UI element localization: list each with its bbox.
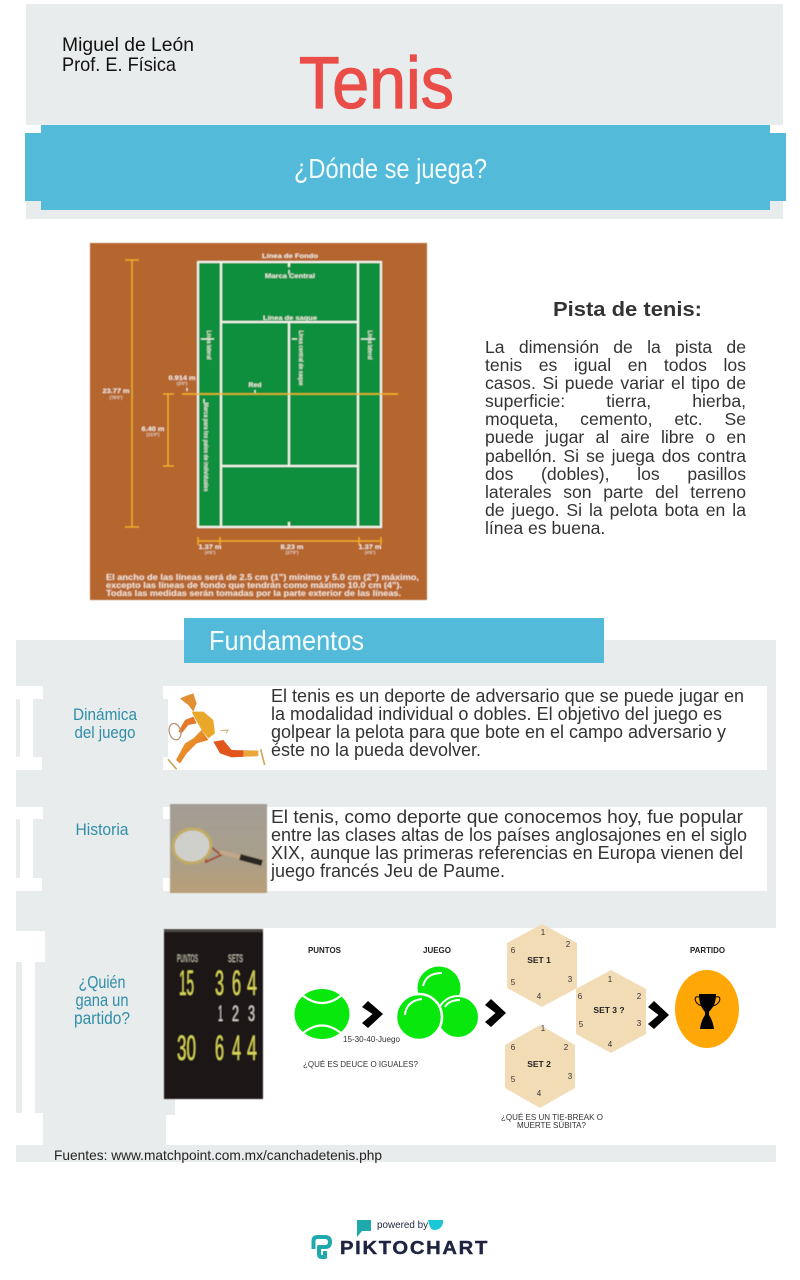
caption: 15-30-40-juego: 15-30-40-Juego [343, 1035, 401, 1044]
court footnote: Todas las medidas serán tomadas por la parte exterior de las líneas. [106, 589, 401, 598]
hexagon: set 1: 2 [566, 940, 571, 949]
court labels: (21'0") [147, 432, 160, 437]
text: dinamica: golpear la pelota para que bote en el campo adversario y [271, 722, 726, 742]
hexagon: set 3: 1 [608, 975, 613, 984]
hexagon: set 3: 6 [578, 992, 583, 1001]
hexagon: set 1: 5 [511, 978, 516, 987]
court labels: Línea lateral [205, 330, 212, 360]
hexagon: set 3: 2 [637, 992, 642, 1001]
label: dinamica: del juego [74, 724, 136, 742]
diagram headings [308, 945, 725, 955]
text: historia: XIX, aunque las primeras referencias en Europa vienen del [271, 843, 743, 863]
court footnote [106, 573, 419, 598]
text: pista de tenis description: moqueta, cemento, etc. Se [485, 409, 746, 429]
court labels: Línea central de saque [297, 330, 304, 386]
court labels: 8.23 m [280, 544, 304, 551]
caption: tie-break: MUERTE SÚBITA? [517, 1120, 586, 1130]
author credit: Miguel de León [62, 34, 194, 56]
court labels: Línea de Fondo [262, 253, 318, 260]
label: historia: Historia [76, 821, 129, 839]
hexagon: set 2: 6 [511, 1043, 516, 1052]
hexagon: set 1: SET 1 [527, 955, 551, 965]
hexagon: set 2: 3 [568, 1072, 573, 1081]
text: pista de tenis description: línea es buena. [485, 518, 605, 538]
court surface [198, 262, 381, 527]
court footnote: El ancho de las líneas será de 2.5 cm (1") mínimo y 5.0 cm (2") máximo, [106, 573, 419, 582]
icon: trophy on orange oval [675, 970, 739, 1048]
small white pointers [187, 270, 375, 403]
hexagon: set 3: SET 3 ? [593, 1005, 625, 1015]
banner: donde se juega: ¿Dónde se juega? [294, 153, 487, 184]
hexagon: set 3 [576, 970, 646, 1053]
scoreboard [164, 929, 263, 1099]
text: pista de tenis description: de juego. Si la pelota bota en la [485, 500, 746, 520]
logo: piktochart [314, 1220, 489, 1258]
row: dinamica del juego [73, 686, 767, 770]
scoreboard: SETS [228, 953, 243, 965]
label: dinamica [73, 706, 138, 742]
hexagon: set 2: 1 [541, 1024, 546, 1033]
text: dinamica: El tenis es un deporte de adversario que se puede jugar en [271, 686, 744, 706]
court labels: Red [248, 382, 262, 389]
tennis court diagram [90, 243, 427, 600]
author credit: Prof. E. Física [62, 54, 176, 76]
scoreboard: 4 [247, 1029, 257, 1068]
photo: wooden racket [170, 804, 267, 893]
text: pista de tenis description: pabellón. Si se juega dos contra [485, 446, 746, 466]
court labels: 6.40 m [142, 426, 165, 433]
scoreboard: 6 [232, 964, 241, 1003]
scoreboard: 4 [232, 1029, 241, 1068]
hexagon: set 2: 4 [537, 1089, 542, 1098]
court labels: Marca Central [265, 273, 315, 280]
scoreboard: 3 [215, 964, 224, 1003]
hexagon: set 2 [505, 1024, 575, 1108]
court labels: Marca para los palos de individuales [202, 402, 209, 492]
scoreboard: 30 [177, 1029, 196, 1068]
icon: running tennis player [167, 686, 268, 770]
banner: donde se juega [25, 125, 786, 210]
label: quien gana [74, 972, 130, 1028]
text: historia [270, 807, 747, 881]
label: dinamica: Dinámica [73, 706, 138, 724]
heading: pista de tenis: Pista de tenis: [553, 299, 702, 321]
court labels: 1.37 m [358, 544, 382, 551]
logo: piktochart: PIKTOCHART [340, 1238, 489, 1258]
text: pista de tenis description: superficie: tierra, hierba, [485, 391, 746, 411]
scoreboard: 4 [247, 964, 257, 1003]
hexagon: set 2: SET 2 [527, 1059, 551, 1069]
title: Tenis [299, 43, 454, 124]
court labels: (78'0") [110, 395, 123, 400]
scoreboard: 2 [232, 1001, 239, 1026]
scoreboard: 15 [179, 964, 194, 1003]
caption: deuce: ¿QUÉ ES DEUCE O IGUALES? [303, 1059, 418, 1069]
hexagon: set 1: 4 [537, 992, 542, 1001]
court labels: (4'6") [205, 550, 216, 555]
court labels: (4'6") [365, 550, 376, 555]
text: dinamica: éste no la pueda devolver. [271, 740, 481, 760]
hexagon: set 2: 5 [511, 1075, 516, 1084]
text: pista de tenis description: laterales son parte del terreno [485, 482, 746, 502]
caption: tie-break [501, 1112, 603, 1130]
court labels: (3'0") [177, 381, 188, 386]
text: pista de tenis description: La dimensión de la pista de [485, 337, 746, 357]
diagram headings: JUEGO [423, 945, 451, 955]
author credit [62, 34, 194, 76]
court labels: Línea lateral [366, 330, 373, 360]
text: pista de tenis description: puede jugar al aire libre o en [485, 427, 746, 447]
heading: fundamentos [184, 618, 604, 663]
header panel [26, 4, 783, 219]
scoreboard: 1 [218, 1001, 223, 1026]
text: dinamica [271, 686, 744, 760]
measurement lines [125, 260, 398, 545]
hexagon: set 1: 3 [568, 975, 573, 984]
scoreboard: 6 [215, 1029, 224, 1068]
heading: fundamentos: Fundamentos [209, 625, 364, 656]
icon: single tennis ball [294, 989, 350, 1039]
text: dinamica: la modalidad individual o dobles. El objetivo del juego es [271, 704, 722, 724]
hexagon: set 1 [507, 924, 577, 1007]
label: quien gana: partido? [74, 1008, 130, 1028]
diagram headings: PARTIDO [690, 945, 725, 955]
row: quien gana un partido [74, 924, 776, 1145]
court labels: 1.37 m [198, 544, 222, 551]
text: pista de tenis description: tenis es igual en todos los [485, 355, 746, 375]
text: historia: entre las clases altas de los países anglosajones en el siglo [271, 825, 747, 845]
hexagon: set 3: 4 [608, 1040, 613, 1049]
court footnote: excepto las líneas de fondo que tendrán como máximo 10.0 cm (4"). [106, 581, 402, 590]
text: pista de tenis description: dos (dobles), los pasillos [485, 464, 746, 484]
text: historia: El tenis, como deporte que conocemos hoy, fue popular [271, 807, 743, 827]
court labels: 23.77 m [102, 388, 130, 395]
text: historia: juego francés Jeu de Paume. [270, 861, 505, 881]
label: quien gana: ¿Quién [78, 972, 126, 992]
scoreboard: 3 [248, 1001, 255, 1026]
diagram headings: PUNTOS [308, 945, 341, 955]
arrow: juego to sets [485, 999, 506, 1027]
court labels: 0.914 m [168, 375, 196, 382]
arrow: sets to partido [648, 1001, 669, 1029]
sources: Fuentes: www.matchpoint.com.mx/canchadetenis.php [54, 1147, 382, 1163]
caption: tie-break: ¿QUÉ ES UN TIE-BREAK O [501, 1112, 603, 1122]
text: pista de tenis description [485, 337, 746, 538]
logo: piktochart: powered by [377, 1220, 428, 1231]
court labels: (27'0") [286, 550, 299, 555]
scoreboard: PUNTOS [177, 953, 198, 965]
label: quien gana: gana un [76, 990, 128, 1010]
row: historia [76, 804, 767, 893]
icon: three tennis balls [396, 966, 479, 1040]
hexagon: set 1: 1 [541, 928, 546, 937]
panel: fundamentos background [16, 640, 776, 1162]
hexagon: set 3: 3 [637, 1019, 642, 1028]
court labels [102, 253, 382, 555]
arrow: puntos to juego [362, 1001, 383, 1028]
hexagon: set 2: 2 [564, 1043, 569, 1052]
hexagon: set 3: 5 [579, 1020, 584, 1029]
hexagon: set 1: 6 [511, 946, 516, 955]
text: pista de tenis description: casos. Si puede variar el tipo de [485, 373, 746, 393]
court labels: Línea de saque [263, 315, 317, 322]
